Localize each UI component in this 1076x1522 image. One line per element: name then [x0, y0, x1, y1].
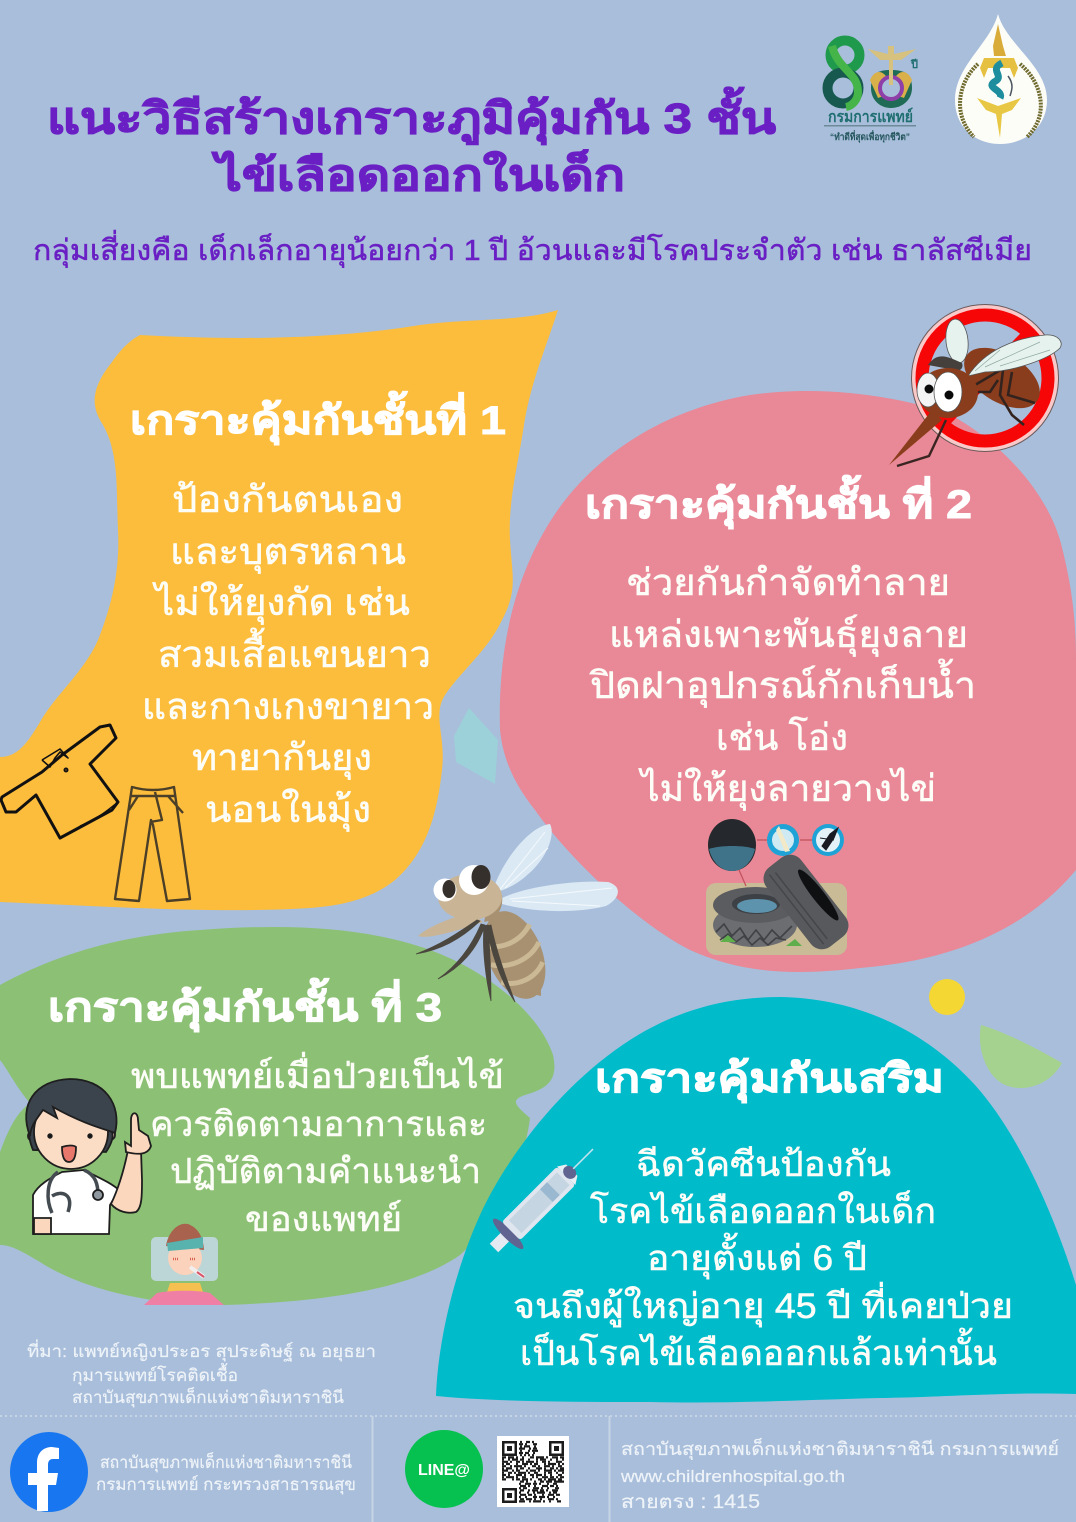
- body text: layer 1: และกางเกงขายาว: [142, 686, 434, 727]
- panel: shield layer 2: [500, 391, 1076, 972]
- title: ไข้เลือดออกในเด็ก: [211, 149, 625, 200]
- footer: LINE badge: LINE@: [418, 1462, 470, 1479]
- footer: hospital contact: สายตรง : 1415: [621, 1492, 760, 1513]
- body text: extra shield: เป็นโรคไข้เลือดออกแล้วเท่านั้น: [520, 1327, 997, 1373]
- body text: layer 2: ช่วยกันกำจัดทำลาย: [626, 562, 950, 603]
- icon: doctor: [26, 1079, 151, 1234]
- body text: layer 3: พบแพทย์เมื่อป่วยเป็นไข้: [131, 1052, 504, 1096]
- footer: facebook: [10, 1432, 356, 1512]
- body text: layer 2: [589, 562, 976, 811]
- body text: extra shield: [513, 1145, 1013, 1373]
- body text: layer 1: สวมเสื้อแขนยาว: [158, 627, 431, 675]
- footer: LINE badge: [405, 1430, 483, 1508]
- icon: shirt: [1, 725, 118, 838]
- body text: layer 1: และบุตรหลาน: [170, 531, 406, 574]
- body text: extra shield: โรคไข้เลือดออกในเด็ก: [590, 1190, 936, 1231]
- body text: layer 1: ป้องกันตนเอง: [172, 479, 403, 520]
- subtitle: risk groups: กลุ่มเสี่ยงคือ เด็กเล็กอายุน้อยกว่า 1 ปี อ้วนและมีโรคประจำตัว เช่น ธาลัสซีเมีย: [33, 230, 1032, 268]
- panel: shield layer 3: [0, 927, 554, 1305]
- heading: layer 1: เกราะคุ้มกันชั้นที่ 1: [130, 391, 506, 446]
- facebook page name: สถาบันสุขภาพเด็กแห่งชาติมหาราชินี: [100, 1451, 352, 1473]
- green blob: [0, 927, 554, 1305]
- footer: hospital contact: สถาบันสุขภาพเด็กแห่งชาติมหาราชินี กรมการแพทย์: [621, 1437, 1059, 1460]
- body text: layer 1: ไม่ให้ยุงกัด เช่น: [152, 581, 410, 625]
- source credit: กุมารแพทย์โรคติดเชื้อ: [72, 1363, 238, 1386]
- yellow blob: [0, 310, 558, 910]
- body text: layer 2: เช่น โอ่ง: [716, 716, 848, 758]
- body text: layer 2: แหล่งเพาะพันธ์ุยุงลาย: [609, 614, 968, 657]
- source credit: [27, 1339, 376, 1408]
- title: [47, 86, 777, 200]
- body text: layer 2: ปิดฝาอุปกรณ์กักเก็บน้ำ: [589, 658, 976, 708]
- icon: central mosquito: [416, 824, 618, 1008]
- logo: hospital seal: [955, 14, 1047, 144]
- footer: QR code: [497, 1436, 569, 1507]
- body text: extra shield: ฉีดวัคซีนป้องกัน: [636, 1145, 891, 1184]
- pink blob: [500, 391, 1076, 972]
- heading: layer 2: เกราะคุ้มกันชั้น ที่ 2: [585, 475, 972, 530]
- panel: extra shield: [436, 997, 1076, 1403]
- body text: layer 3: [131, 1052, 504, 1239]
- decoration: yellow dot: [929, 979, 965, 1015]
- facebook page name: [96, 1451, 356, 1495]
- footer: hospital contact: [620, 1437, 1059, 1513]
- body text: layer 2: ไม่ให้ยุงลายวางไข่: [638, 767, 936, 811]
- footer: hospital contact: www.childrenhospital.go.th: [620, 1467, 845, 1486]
- decoration: pale teal leaf: [454, 708, 498, 784]
- body text: layer 1: นอนในมุ้ง: [205, 788, 371, 832]
- icon: sick child: [144, 1224, 224, 1305]
- body text: layer 1: ทายากันยุง: [192, 737, 372, 780]
- body text: layer 3: ควรติดตามอาการและ: [150, 1105, 487, 1144]
- logo: department 80 years: ปี: [910, 58, 918, 71]
- source credit: ที่มา: แพทย์หญิงประอร สุประดิษฐ์ ณ อยุธยา: [27, 1339, 376, 1362]
- body text: extra shield: อายุตั้งแต่ 6 ปี: [647, 1232, 867, 1279]
- decoration: light green half disc: [980, 1025, 1062, 1088]
- icon: trousers: [115, 787, 190, 901]
- body text: layer 1: [142, 479, 434, 832]
- title: แนะวิธีสร้างเกราะภูมิคุ้มกัน 3 ชั้น: [47, 86, 777, 146]
- panel: shield layer 1: [0, 310, 558, 910]
- source credit: สถาบันสุขภาพเด็กแห่งชาติมหาราชินี: [72, 1386, 344, 1408]
- body text: layer 3: ปฏิบัติตามคำแนะนำ: [170, 1152, 481, 1191]
- heading: extra shield: เกราะคุ้มกันเสริม: [595, 1057, 944, 1104]
- logo: department 80 years: “ทำดีที่สุดเพื่อทุกชีวิต”: [830, 129, 910, 143]
- icon: facebook: [10, 1432, 88, 1512]
- icon: no mosquito sign: [889, 304, 1061, 466]
- logo: department 80 years: กรมการแพทย์: [828, 107, 913, 126]
- teal blob: [436, 997, 1076, 1403]
- icon: syringe: [479, 1134, 608, 1263]
- icon: tyres with stagnant water: [706, 819, 854, 955]
- body text: layer 3: ของแพทย์: [245, 1200, 402, 1239]
- heading: layer 3: เกราะคุ้มกันชั้น ที่ 3: [48, 978, 442, 1033]
- body text: extra shield: จนถึงผู้ใหญ่อายุ 45 ปี ที่เคยป่วย: [513, 1282, 1013, 1327]
- facebook page name: กรมการแพทย์ กระทรวงสาธารณสุข: [96, 1475, 356, 1495]
- logo: department 80 years: [824, 40, 918, 143]
